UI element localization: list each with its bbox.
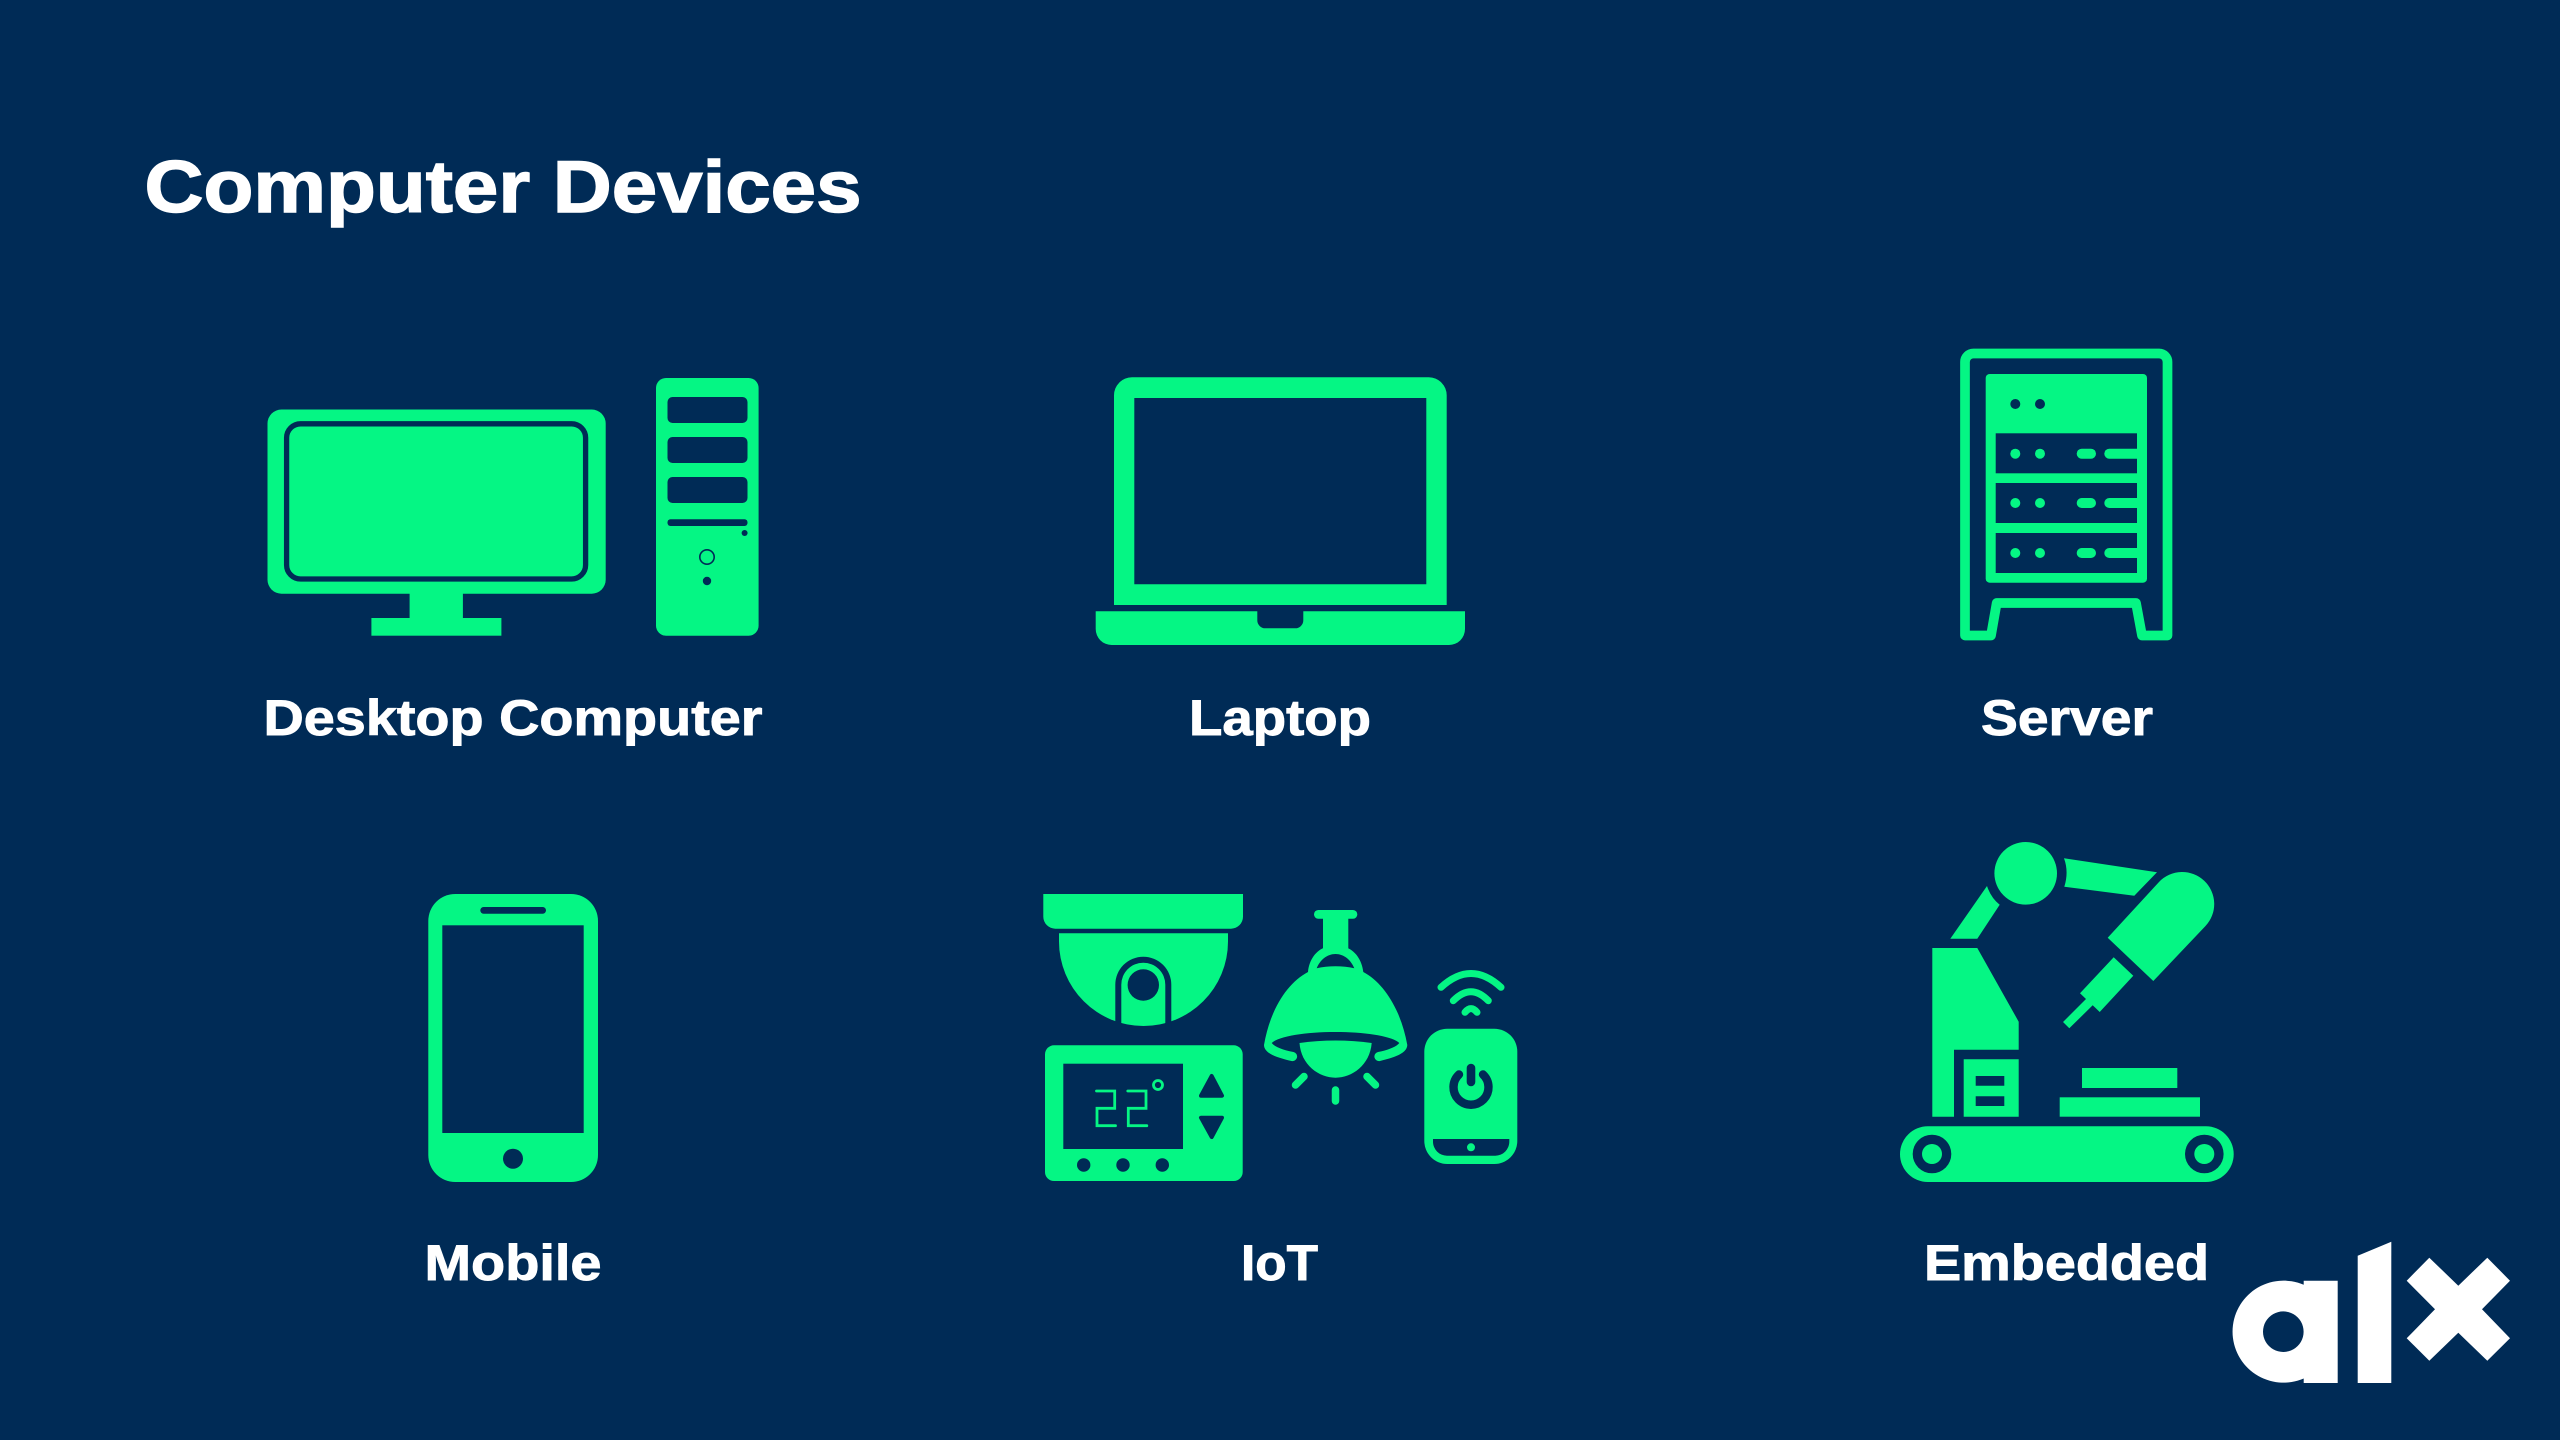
panel: laptop <box>1096 377 1465 746</box>
logo: alx <box>2233 1242 2510 1383</box>
icon: monitor <box>268 410 606 636</box>
icon: ceiling lamp <box>1264 910 1407 1101</box>
icon: thermostat <box>1045 1045 1243 1181</box>
label: iot: IoT <box>1241 1235 1318 1291</box>
panel: server <box>1965 354 2168 746</box>
label: desktop computer: Desktop Computer <box>264 690 762 746</box>
icon: smartphone <box>428 894 598 1182</box>
title: Computer Devices <box>144 147 862 228</box>
label: laptop: Laptop <box>1189 690 1371 746</box>
panel: iot <box>1043 894 1517 1291</box>
panel: mobile <box>424 894 602 1291</box>
icon: laptop <box>1096 377 1465 645</box>
panel: embedded <box>1900 842 2234 1291</box>
icon: security camera <box>1043 894 1243 1032</box>
label: server: Server <box>1981 690 2153 746</box>
panel: desktop computer <box>264 378 762 746</box>
icon: tower <box>656 378 759 636</box>
icon: smart phone remote <box>1424 973 1517 1164</box>
icon: server rack <box>1965 354 2168 636</box>
icon: robot arm on conveyor <box>1900 842 2234 1182</box>
label: mobile: Mobile <box>424 1235 602 1291</box>
label: embedded: Embedded <box>1924 1235 2209 1291</box>
